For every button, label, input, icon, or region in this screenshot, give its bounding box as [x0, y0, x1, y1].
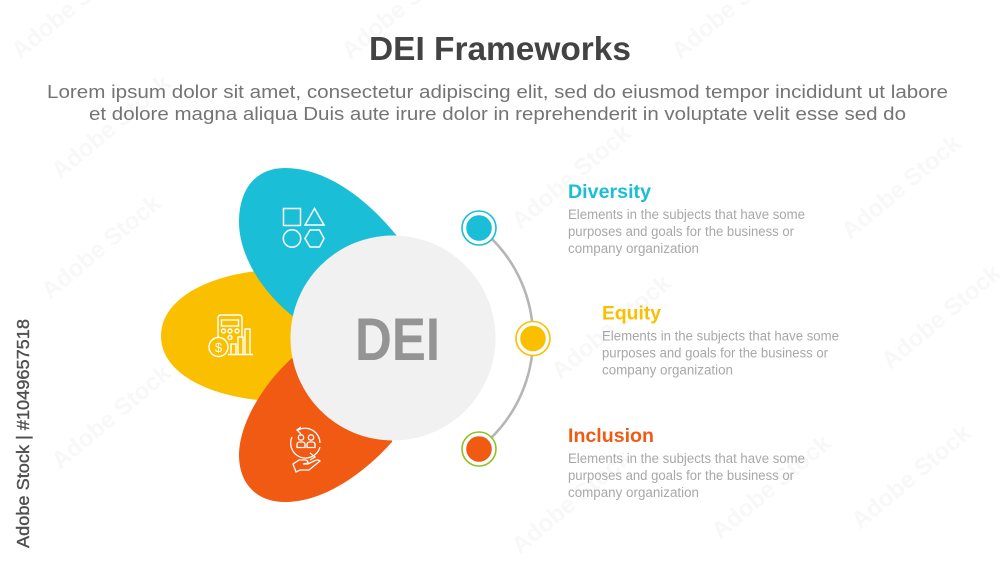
connector arc [491, 238, 533, 438]
icon: shapes [283, 208, 324, 247]
icon: people in cycle over hand [291, 427, 320, 472]
text block: equity: purposes and goals for the business or [602, 346, 828, 360]
text block: diversity: purposes and goals for the business or [568, 224, 794, 239]
text block: equity: company organization [602, 362, 733, 378]
text block: inclusion: company organization [568, 485, 699, 500]
text: Adobe Stock [507, 444, 637, 560]
text block: inclusion [568, 425, 805, 500]
node: diversity [462, 211, 496, 245]
center label: DEI [355, 306, 440, 373]
petal: equity yellow [161, 271, 320, 400]
text block: equity: Elements in the subjects that have some [602, 328, 839, 344]
text block: equity: Equity [602, 302, 661, 324]
text: Adobe Stock [47, 359, 177, 475]
petal: diversity teal [239, 168, 397, 338]
petal: inclusion orange [239, 338, 393, 502]
text block: inclusion: Elements in the subjects that have some [568, 451, 805, 466]
node: equity [516, 322, 550, 356]
text block: equity [602, 302, 839, 378]
text block: diversity: Elements in the subjects that have some [568, 207, 805, 222]
text: Adobe Stock [47, 69, 177, 185]
node: inclusion [462, 432, 496, 466]
text block: inclusion: purposes and goals for the business or [568, 468, 794, 483]
title: DEI Frameworks [369, 30, 631, 67]
text block: diversity: company organization [568, 241, 699, 256]
icon: calculator and chart [209, 315, 253, 356]
text: Adobe Stock [707, 429, 837, 545]
text: Adobe Stock [37, 189, 167, 305]
text block: inclusion: Inclusion [568, 425, 654, 447]
icon: calculator and chart: $ [215, 340, 223, 355]
center circle [290, 236, 496, 440]
text: Adobe Stock [507, 119, 637, 235]
stock id side label: Adobe Stock | #1049657518 [13, 319, 33, 548]
text: Adobe Stock [837, 129, 967, 245]
subtitle text: et dolore magna aliqua Duis aute irure dolor in reprehenderit in voluptate velit esse sed do [89, 103, 906, 124]
subtitle text [47, 81, 948, 124]
text block: diversity [568, 181, 805, 256]
text: Adobe Stock [847, 419, 977, 535]
subtitle text: Lorem ipsum dolor sit amet, consectetur adipiscing elit, sed do eiusmod tempor incididunt ut labore [47, 81, 948, 102]
text block: diversity: Diversity [568, 181, 651, 203]
text: Adobe Stock [547, 269, 677, 385]
